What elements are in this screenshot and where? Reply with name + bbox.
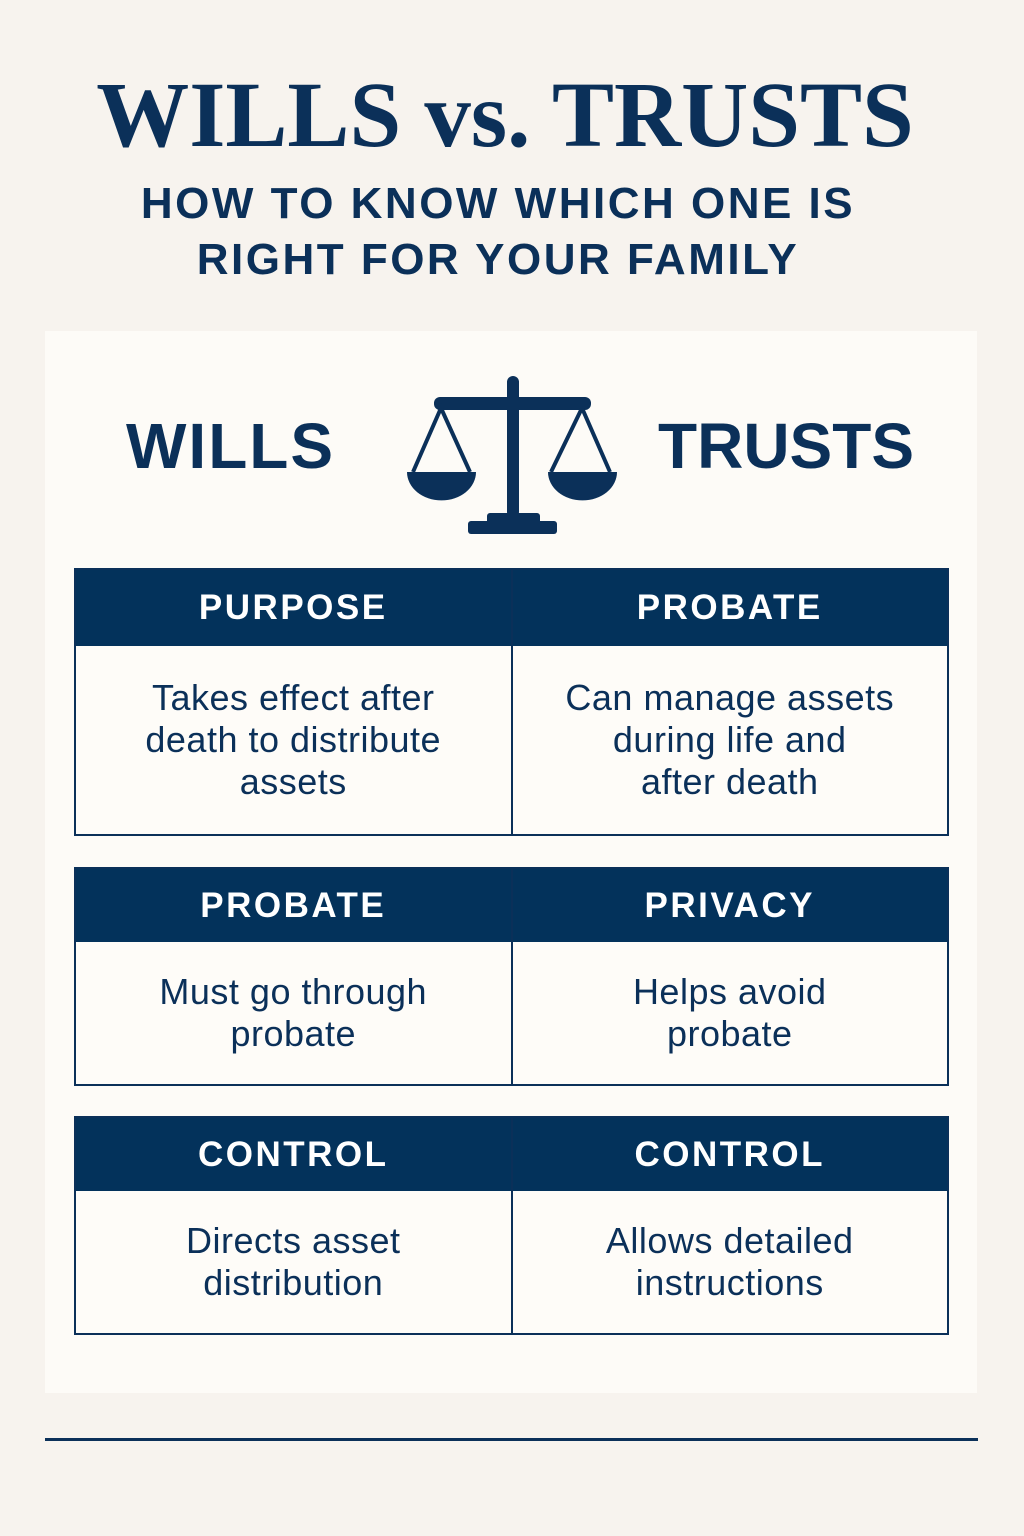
table row: probate / privacy: Must go through bbox=[159, 971, 427, 1012]
table row: purpose / probate: after death bbox=[641, 761, 819, 802]
title: WILLS vs. TRUSTS bbox=[96, 64, 914, 167]
table row: control: distribution bbox=[203, 1262, 383, 1303]
table row: probate / privacy: PROBATE bbox=[200, 886, 386, 924]
subtitle: HOW TO KNOW WHICH ONE IS bbox=[141, 179, 855, 228]
table row: probate / privacy bbox=[74, 867, 949, 1086]
icon: scales bbox=[407, 376, 617, 534]
table row: purpose / probate: during life and bbox=[613, 719, 847, 760]
table row: purpose / probate bbox=[74, 568, 949, 836]
table row: probate / privacy: probate bbox=[230, 1013, 356, 1054]
table row: purpose / probate: Can manage assets bbox=[565, 677, 894, 718]
table row: control: Allows detailed bbox=[606, 1220, 854, 1261]
table row: probate / privacy: PRIVACY bbox=[644, 886, 815, 924]
table row: purpose / probate: death to distribute bbox=[145, 719, 441, 760]
table row: purpose / probate: PURPOSE bbox=[199, 588, 388, 627]
table row: purpose / probate: PROBATE bbox=[637, 588, 823, 627]
heading: wills: WILLS bbox=[126, 410, 335, 482]
table row: probate / privacy: probate bbox=[667, 1013, 793, 1054]
table row: purpose / probate: Takes effect after bbox=[152, 677, 434, 718]
table row: probate / privacy: Helps avoid bbox=[633, 971, 827, 1012]
table row: control: Directs asset bbox=[186, 1220, 401, 1261]
table row: control: instructions bbox=[636, 1262, 824, 1303]
table row: control: CONTROL bbox=[198, 1134, 389, 1174]
table row: control bbox=[74, 1116, 949, 1335]
subtitle: RIGHT FOR YOUR FAMILY bbox=[197, 235, 799, 284]
table row: purpose / probate: assets bbox=[240, 761, 347, 802]
panel: comparison bbox=[45, 331, 977, 1393]
heading: trusts: TRUSTS bbox=[658, 410, 914, 482]
table row: control: CONTROL bbox=[634, 1134, 825, 1174]
subtitle bbox=[141, 179, 855, 284]
